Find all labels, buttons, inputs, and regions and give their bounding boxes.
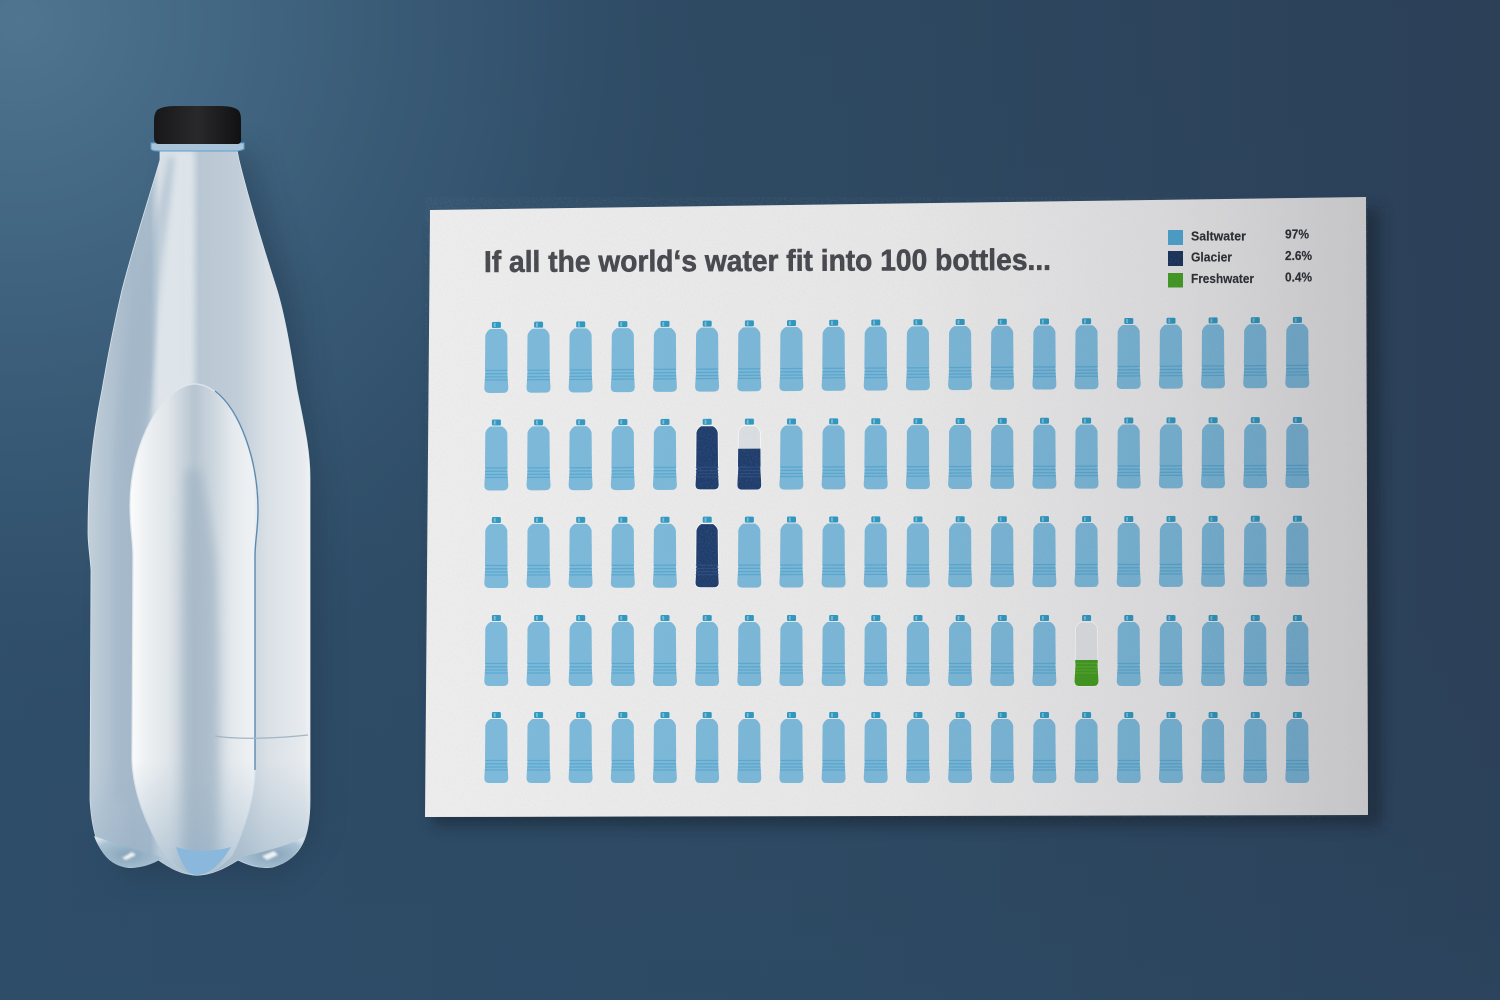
- bottle left strip shading: [113, 158, 176, 800]
- photo: plastic water bottle: [88, 106, 318, 875]
- row 5 of bottles: [484, 712, 1309, 783]
- legend: saltwater: 97%: [1285, 228, 1309, 242]
- bottle inner dome: [130, 384, 258, 875]
- bottle grid: 100 bottles: [484, 317, 1309, 783]
- legend: saltwater: Saltwater: [1191, 230, 1246, 244]
- center foot: [176, 847, 231, 875]
- dome center shadow band: [183, 470, 218, 860]
- poster lighting overlay: [425, 197, 1368, 817]
- legend: glacier: [1168, 249, 1312, 266]
- legend: freshwater: 0.4%: [1285, 270, 1312, 284]
- row 2 of bottles, with one full and one partial glacier bottle: [484, 417, 1309, 491]
- poster shadow: [432, 208, 1382, 826]
- legend: saltwater: [1168, 228, 1309, 245]
- row 1 of bottles: [484, 317, 1309, 393]
- bottle cap: [154, 106, 241, 144]
- bottle collar ring: [151, 143, 244, 151]
- row 3 of bottles, with one full glacier bottle: [484, 516, 1309, 588]
- dome right edge line: [215, 391, 258, 770]
- left foot: [94, 836, 163, 868]
- row 4 of bottles, with one partial freshwater bottle: [484, 615, 1309, 687]
- bottle base shading: [90, 760, 310, 875]
- poster sheet: [425, 197, 1368, 817]
- legend: [1168, 228, 1312, 288]
- legend: freshwater: Freshwater: [1191, 272, 1254, 286]
- legend: glacier: Glacier: [1191, 250, 1232, 264]
- legend: glacier: 2.6%: [1285, 249, 1312, 263]
- legend: freshwater: [1168, 270, 1312, 288]
- poster paper grain: [425, 197, 1368, 817]
- title: If all the world‘s water fit into 100 bottles...: [484, 244, 1051, 279]
- water level line: [215, 735, 308, 738]
- right foot: [238, 836, 305, 868]
- bottle neck light band: [148, 153, 193, 440]
- bottle shadow: [110, 150, 318, 875]
- bottle body: [88, 150, 310, 875]
